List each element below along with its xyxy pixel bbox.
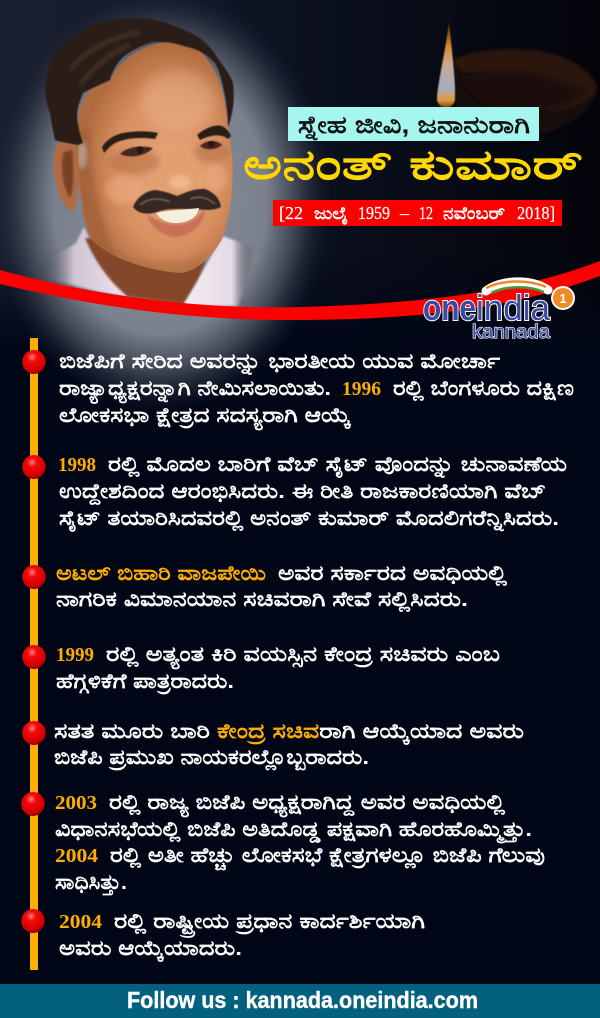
logo: oneindia kannada xyxy=(423,281,575,343)
text block 1: ರಲ್ಲಿ ಬೆಂಗಳೂರು ದಕ್ಷಿಣ xyxy=(393,377,575,402)
text block 3 xyxy=(56,562,507,613)
face shading xyxy=(76,70,230,285)
text block 4: ರಲ್ಲಿ ಅತ್ಯಂತ ಕಿರಿ ವಯಸ್ಸಿನ ಕೇಂದ್ರ ಸಚಿವರು ಎಂಬ xyxy=(106,643,500,670)
text block 2: ರಲ್ಲಿ ಮೊದಲ ಬಾರಿಗೆ ವೆಬ್ ಸೈಟ್ ವೊಂದನ್ನು ಚುನಾವಣೆಯ xyxy=(108,453,567,479)
ear xyxy=(54,140,80,211)
date banner: ನವೆಂಬರ್ xyxy=(443,204,505,223)
timeline markers xyxy=(21,350,46,933)
date banner: [22 xyxy=(279,203,303,223)
text block 2: 1998 xyxy=(58,454,96,476)
footer: Follow us : kannada.oneindia.com xyxy=(127,987,478,1013)
subtitle box xyxy=(288,107,539,141)
date banner xyxy=(273,200,562,226)
icon: diya lamp with flame xyxy=(437,20,597,143)
text block 4: ಹೆಗ್ಗಳಿಕೆಗೆ ಪಾತ್ರರಾದರು. xyxy=(56,670,234,695)
text block 5: ಬಿಜೆಪಿ ಪ್ರಮುಖ ನಾಯಕರಲ್ಲೊಬ್ಬರಾದರು. xyxy=(54,746,369,772)
red swoosh xyxy=(0,261,600,320)
hair xyxy=(45,18,234,145)
mustache xyxy=(133,189,221,214)
text block 6: 2003 xyxy=(55,792,97,814)
text block 6: 2004 xyxy=(55,845,98,867)
logo: oneindia kannada: kannada xyxy=(472,322,550,343)
date banner: ಜುಲೈ xyxy=(314,204,348,226)
text block 2: ಉದ್ದೇಶದಿಂದ ಆರಂಭಿಸಿದರು. ಈ ರೀತಿ ರಾಜಕಾರಣಿಯಾಗಿ ವೆಬ್ xyxy=(59,480,546,506)
shirt left xyxy=(38,227,128,297)
text block 3: ನಾಗರಿಕ ವಿಮಾನಯಾನ ಸಚಿವರಾಗಿ ಸೇವೆ ಸಲ್ಲಿಸಿದರು. xyxy=(56,588,468,613)
logo: oneindia kannada: one xyxy=(423,287,476,328)
date banner: 1959 xyxy=(358,203,390,223)
text block 7: ರಲ್ಲಿ ರಾಷ್ಟ್ರೀಯ ಪ್ರಧಾನ ಕಾರ್ದರ್ಶಿಯಾಗಿ xyxy=(114,910,425,938)
text block 1 xyxy=(59,350,575,431)
face xyxy=(77,41,233,273)
text block 1: ಲೋಕಸಭಾ ಕ್ಷೇತ್ರದ ಸದಸ್ಯರಾಗಿ ಆಯ್ಕೆ xyxy=(59,404,352,431)
text block 3: ಅವರ ಸರ್ಕಾರದ ಅವಧಿಯಲ್ಲಿ xyxy=(278,562,507,587)
date banner: – xyxy=(399,203,410,223)
text block 2 xyxy=(58,453,567,533)
nose xyxy=(153,145,207,196)
date banner: 12 xyxy=(419,203,433,223)
footer xyxy=(0,984,600,1018)
portrait photo xyxy=(0,0,332,415)
glow xyxy=(0,0,332,415)
text block 6: ರಲ್ಲಿ ಅತೀ ಹೆಚ್ಚು ಲೋಕಸಭೆ ಕ್ಷೇತ್ರಗಳಲ್ಲೂ ಬಿಜೆಪಿ ಗೆಲುವು xyxy=(110,844,546,871)
eyes xyxy=(120,141,222,156)
text block 6 xyxy=(55,791,546,896)
date banner: 2018] xyxy=(517,203,555,223)
text block 1: ಬಿಜೆಪಿಗೆ ಸೇರಿದ ಅವರನ್ನು ಭಾರತೀಯ ಯುವ ಮೋರ್ಚಾ xyxy=(59,350,500,376)
text block 7: ಅವರು ಆಯ್ಕೆಯಾದರು. xyxy=(59,937,242,962)
logo: oneindia kannada: 1 xyxy=(559,291,567,306)
text block 1: ರಾಜ್ಯಾಧ್ಯಕ್ಷರನ್ನಾಗಿ ನೇಮಿಸಲಾಯಿತು. xyxy=(59,377,331,405)
logo: oneindia kannada: india xyxy=(476,287,551,328)
text block 6: ರಲ್ಲಿ ರಾಜ್ಯ ಬಿಜೆಪಿ ಅಧ್ಯಕ್ಷರಾಗಿದ್ದ ಅವರ ಅವಧಿಯಲ್ಲಿ xyxy=(109,791,505,818)
timeline bar xyxy=(30,338,38,970)
subtitle box: ಸ್ನೇಹ ಜೀವಿ, ಜನಾನುರಾಗಿ xyxy=(298,112,530,141)
eyebrows xyxy=(102,131,158,153)
hair highlights xyxy=(70,32,140,85)
text block 4 xyxy=(56,643,500,695)
text block 4: 1999 xyxy=(56,644,94,666)
text block 7: 2004 xyxy=(59,911,102,933)
shirt right xyxy=(182,236,254,306)
smile xyxy=(147,208,205,237)
text block 2: ಸೈಟ್ ತಯಾರಿಸಿದವರಲ್ಲಿ ಅನಂತ್ ಕುಮಾರ್ ಮೊದಲಿಗರೆನ್ನಿಸಿದರು. xyxy=(59,507,559,533)
text block 1: 1996 xyxy=(342,378,381,400)
header background xyxy=(0,0,600,350)
text block 6: ವಿಧಾನಸಭೆಯಲ್ಲಿ ಬಿಜೆಪಿ ಅತಿದೊಡ್ಡ ಪಕ್ಷವಾಗಿ ಹೊರಹೊಮ್ಮಿತ್ತು. xyxy=(55,818,532,844)
neck xyxy=(85,238,205,304)
title: ಅನಂತ್ ಕುಮಾರ್ xyxy=(243,141,583,188)
text block 5: ಸತತ ಮೂರು ಬಾರಿ ಕೇಂದ್ರ ಸಚಿವ ರಾಗಿ ಆಯ್ಕೆಯಾದ ಅವರು xyxy=(54,720,525,745)
text block 5 xyxy=(54,720,525,772)
text block 7 xyxy=(59,910,425,962)
text block 3: ಅಟಲ್ ಬಿಹಾರಿ ವಾಜಪೇಯಿ xyxy=(56,562,267,585)
text block 6: ಸಾಧಿಸಿತ್ತು. xyxy=(55,871,127,896)
